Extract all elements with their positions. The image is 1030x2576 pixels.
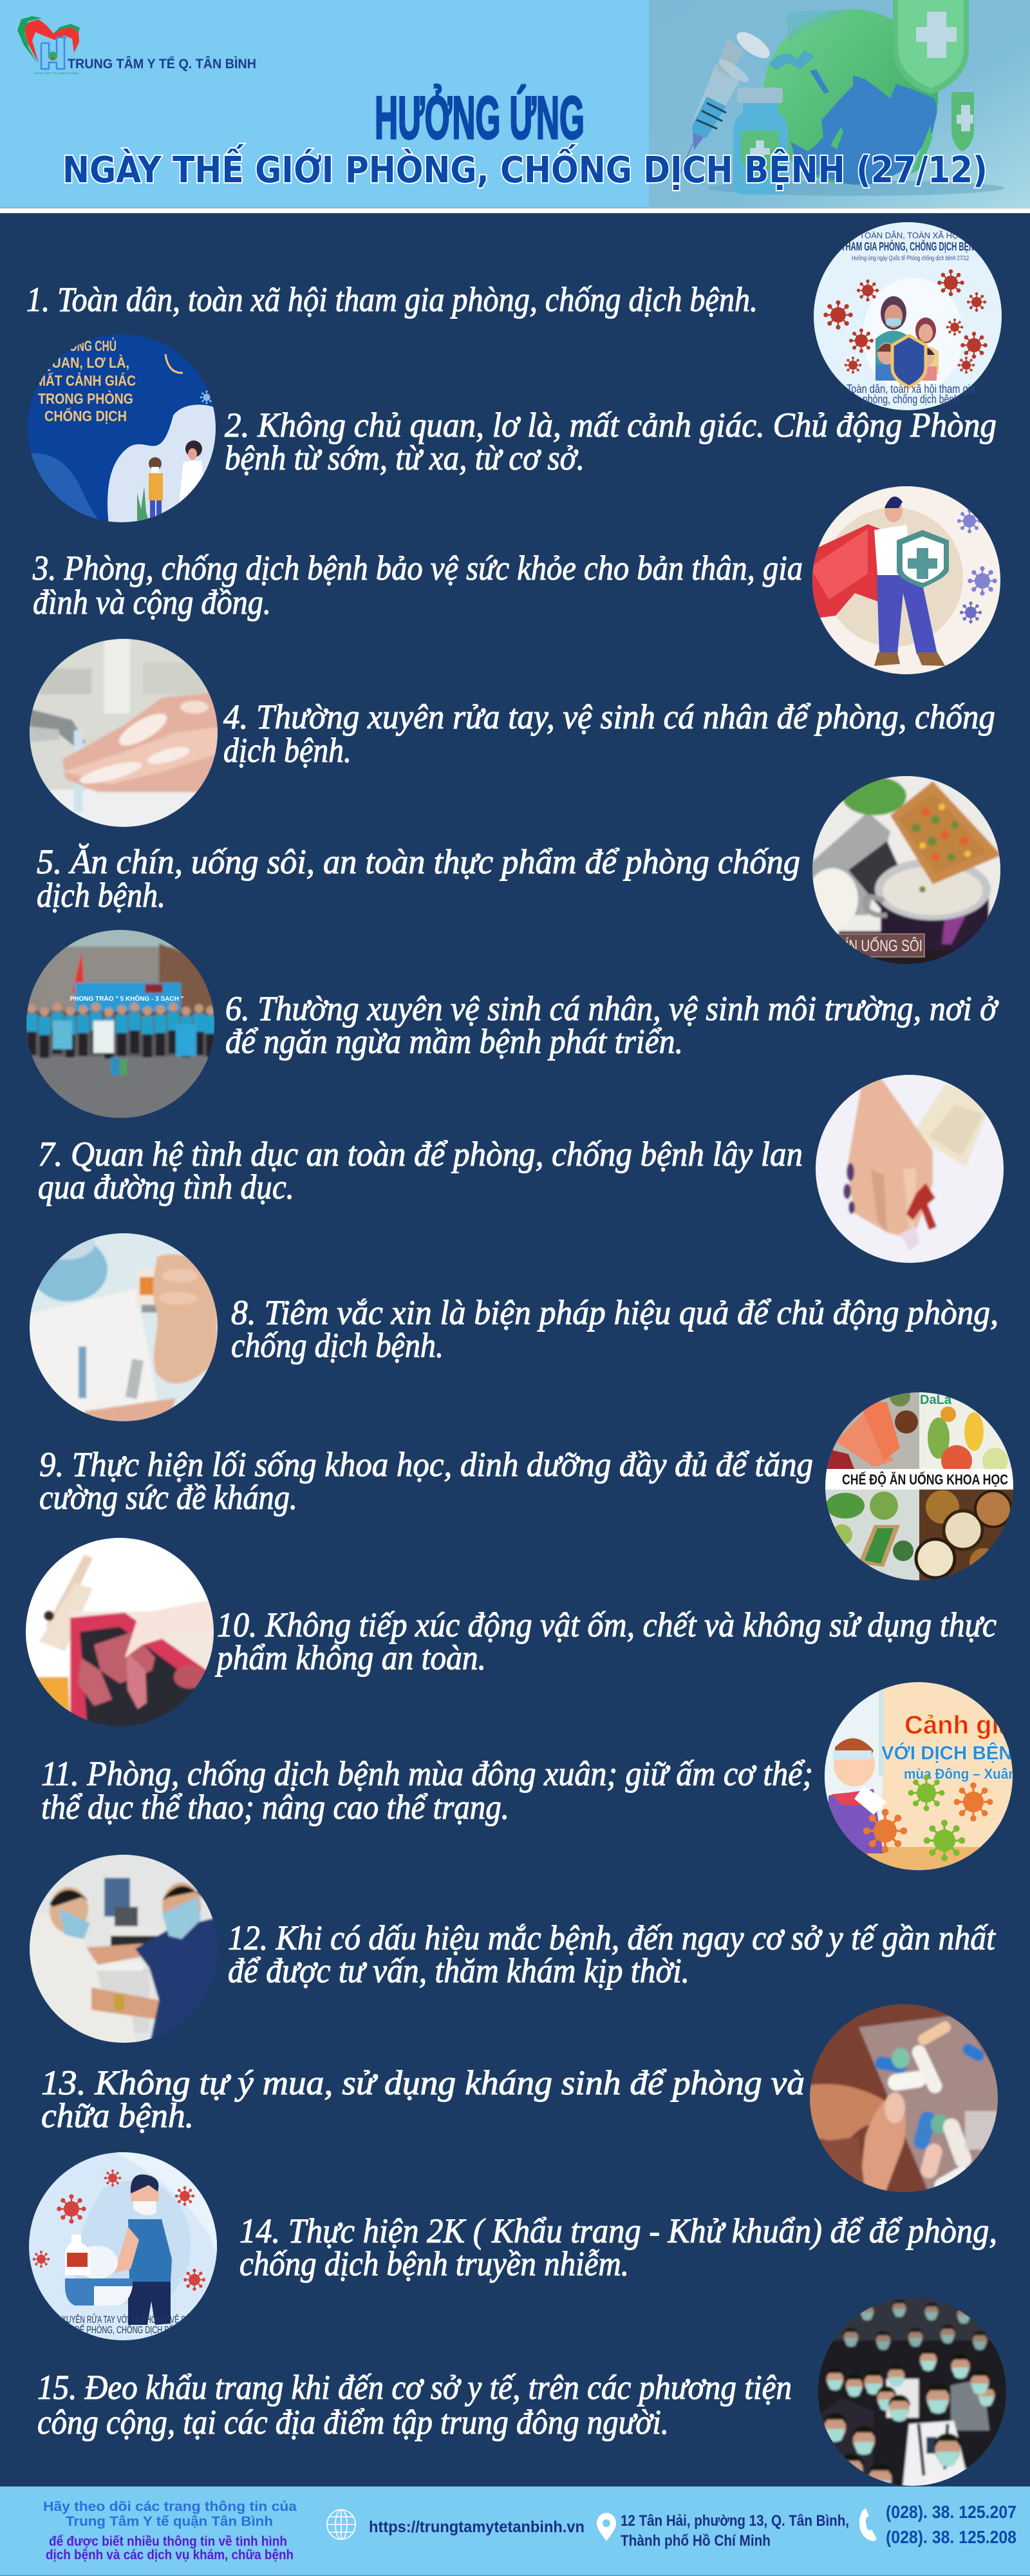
item 3 image: hero with shield [810,484,1003,677]
item 8 text: 8. Tiêm vắc xin là biện pháp hiệu quả để chủ động phòng, [231,1293,998,1332]
logo: TRUNG TÂM Y TẾ QUẬN TÂN BÌNH [33,71,79,75]
footer follow text: Trung Tâm Y tế quận Tân Bình [66,2514,273,2529]
item 14 image: man washing hands with soap [26,2150,220,2343]
item 1 image caption: Toàn dân, toàn xã hội tham gia [847,383,976,395]
vial [733,88,788,194]
footer follow text: dịch bệnh và các dịch vụ khám, chữa bệnh [46,2548,294,2562]
item 2 image: vigilance poster: TRONG PHÒNG [38,390,133,407]
header illustration: globe, syringe, vial, shields [649,0,1030,208]
item 7 text [38,1135,803,1206]
item 6 image: group photo cleaning campaign [24,927,217,1121]
phone numbers: (028). 38. 125.208 [886,2527,1016,2547]
item 1 image caption: phòng, chống dịch bệnh [863,393,959,406]
item 15 text [37,2368,792,2441]
item 13 image: antibiotic pills in hand [807,2002,1000,2197]
item 9 text: cường sức đề kháng. [39,1478,297,1517]
item 13 text [41,2063,805,2135]
item 11 text [41,1754,813,1826]
syringe [674,27,774,187]
item 3 text: đình và cộng đồng. [33,583,271,621]
item 2 image: vigilance poster [25,332,218,527]
doctor [185,440,202,457]
item 3 text [32,549,803,621]
item 8 text [231,1293,998,1365]
item 4 image: washing hands [27,636,223,829]
address: 12 Tân Hải, phường 13, Q. Tân Bình, [621,2512,849,2530]
item 1 text: 1. Toàn dân, toàn xã hội tham gia phòng, chống dịch bệnh. [26,280,758,319]
logo wordmark: TRUNG TÂM Y TẾ Q. TÂN BÌNH [68,56,256,71]
icon: phone [859,2508,877,2541]
item 6 image: group photo cleaning campaign: PHONG TRÀO " 5 KHÔNG - 3 SẠCH " [70,994,184,1003]
item 1 image: family protected from viruses: TOÀN DÂN, TOÀN XÃ HỘI [859,231,961,240]
item 7 image: holding hands [813,1072,1006,1265]
item 12 text [228,1918,997,1990]
item 5 text: dịch bệnh. [37,876,165,914]
item 6 text [225,989,999,1061]
footer [0,2486,1030,2576]
item 2 text: 2. Không chủ quan, lơ là, mất cảnh giác. Chủ động Phòng [225,406,997,444]
website url: https://trungtamytetanbinh.vn [369,2518,585,2536]
man [113,2174,172,2325]
item 2 image: vigilance poster: QUAN, LƠ LÀ, [42,354,129,371]
item 10 image: meat tray and syringe [23,1535,218,1734]
item 9 image: scientific diet collage [823,1386,1016,1583]
header banner [0,0,1030,213]
item 2 image: vigilance poster: MẤT CẢNH GIÁC [35,371,136,389]
icon: location pin [597,2513,616,2541]
item 13 text: 13. Không tự ý mua, sử dụng kháng sinh để phòng và [41,2063,805,2102]
item 11 image: winter-spring disease warning: VỚI DỊCH BỆNH [881,1742,1026,1764]
large shield [893,0,969,94]
item 1 image caption [847,383,976,406]
item 1 image: family protected from viruses: Hưởng ứng ngày Quốc tế Phòng chống dịch bệnh 27/12 [852,254,969,262]
item 10 text: phẩm không an toàn. [214,1638,486,1677]
item 2 text: bệnh từ sớm, từ xa, từ cơ sở. [225,439,585,477]
item 5 image: cooking pot [807,773,1003,967]
item 12 image: doctor examining patient [27,1852,220,2045]
item 6 text: 6. Thường xuyên vệ sinh cá nhân, vệ sinh môi trường, nơi ở [225,989,999,1028]
address: Thành phố Hồ Chí Minh [621,2532,771,2550]
poster caption: XUYÊN RỬA TAY VỚI XÀ PHÒNG, VỆ SINH [62,2313,197,2325]
item 2 image: vigilance poster: KHÔNG CHỦ [55,336,117,354]
item 2 image: vigilance poster: CHỐNG DỊCH [44,407,127,424]
item 11 image: winter-spring disease warning: Cảnh giác [904,1711,1027,1739]
item 9 image: scientific diet collage: DaLa [920,1393,952,1407]
caption strip [836,934,924,957]
item 15 text: 15. Đeo khẩu trang khi đến cơ sở y tế, trên các phương tiện [37,2368,792,2407]
item 15 image: crowd wearing masks [816,2295,1009,2495]
poster caption [62,2313,186,2335]
address [621,2512,849,2550]
item 5 text [37,842,800,914]
item 4 text [223,697,995,770]
item 4 text: dịch bệnh. [223,731,351,770]
small shield [951,92,974,151]
item 10 text [214,1605,997,1677]
item 1 image: family protected from viruses [811,220,1004,413]
item 12 text: để được tư vấn, thăm khám kịp thời. [228,1951,689,1990]
item 5 text: 5. Ăn chín, uống sôi, an toàn thực phẩm để phòng chống [37,842,800,881]
item 11 text: 11. Phòng, chống dịch bệnh mùa đông xuân; giữ ấm cơ thể; [41,1754,813,1793]
item 14 text [239,2211,997,2283]
item 15 text: công cộng, tại các địa điểm tập trung đông người. [37,2403,669,2441]
item 6 text: để ngăn ngừa mầm bệnh phát triển. [225,1022,683,1061]
icon: globe [327,2510,355,2539]
title line 1: HƯỞNG ỨNG [375,84,585,151]
item 2 text [225,406,997,477]
item 14 text: 14. Thực hiện 2K ( Khẩu trang - Khử khuẩn) để để phòng, [239,2211,997,2250]
poster caption: ĐỂ PHÒNG, CHỐNG DỊCH BỆNH [75,2323,184,2336]
item 3 text: 3. Phòng, chống dịch bệnh bảo vệ sức khỏe cho bản thân, gia [32,549,803,587]
item 8 image: vaccine vial and syringe [27,1227,220,1424]
item 9 text: 9. Thực hiện lối sống khoa học, dinh dưỡng đầy đủ để tăng [39,1445,813,1484]
item 4 text: 4. Thường xuyên rửa tay, vệ sinh cá nhân để phòng, chống [223,697,995,736]
globe [763,9,938,184]
footer follow text [43,2499,297,2562]
logo [17,16,256,75]
item 8 text: chống dịch bệnh. [231,1326,444,1365]
footer follow text: Hãy theo dõi các trang thông tin của [43,2499,297,2514]
item 7 text: qua đường tình dục. [38,1168,294,1206]
item 11 text: thể dục thể thao; nâng cao thể trạng. [41,1788,509,1826]
item 9 text [39,1445,813,1517]
item 13 text: chữa bệnh. [41,2096,194,2135]
phone numbers [886,2502,1016,2547]
item 7 text: 7. Quan hệ tình dục an toàn để phòng, chống bệnh lây lan [38,1135,803,1173]
item 11 image: winter-spring disease warning: mùa Đông – Xuân [904,1766,1016,1782]
diet label band [823,1469,1016,1490]
child [149,457,162,470]
shield [892,336,926,387]
footer follow text: để được biết nhiều thông tin về tình hình [49,2534,287,2549]
phone numbers: (028). 38. 125.207 [886,2502,1016,2522]
item 11 image: winter-spring disease warning [825,1682,1013,1870]
caption strip: ÍN UỐNG SÔI [845,936,922,955]
item 14 text: chống dịch bệnh truyền nhiễm. [239,2244,629,2283]
